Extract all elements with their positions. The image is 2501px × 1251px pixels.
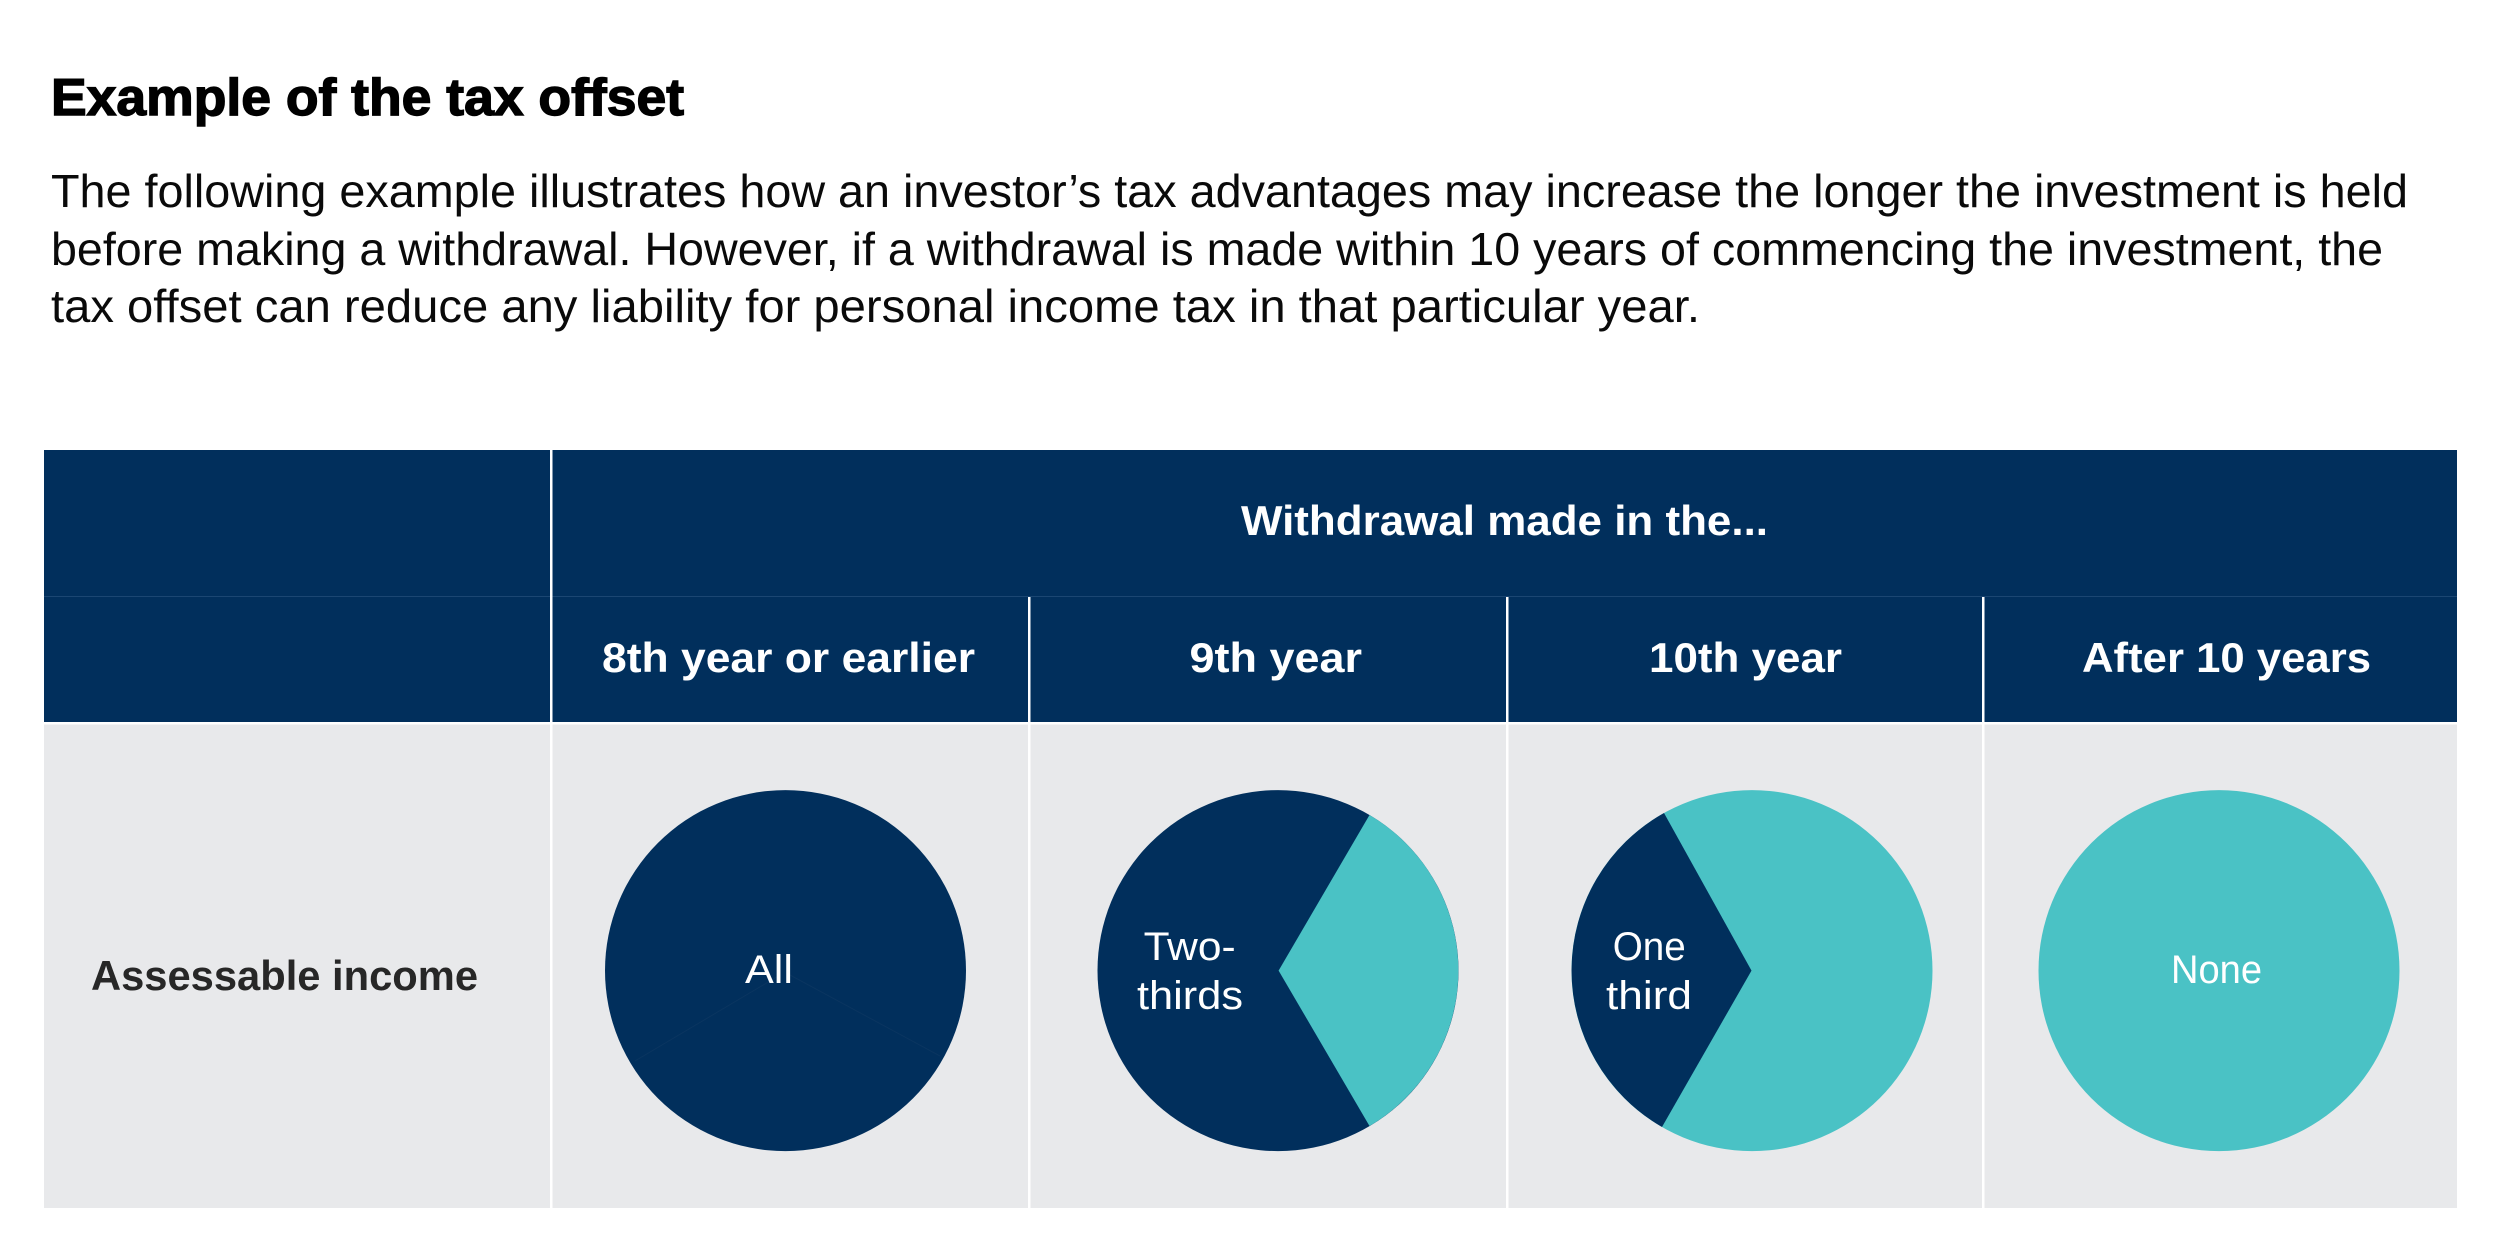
- intro text block: The following example illustrates how an investor’s tax advantages may increase the longer the investment is held: [51, 165, 2408, 217]
- panel: table: [44, 450, 2457, 1208]
- pie chart: one third: One: [1613, 925, 1686, 969]
- intro text block: before making a withdrawal. However, if a withdrawal is made within 10 years of commencing the investment, the: [51, 223, 2383, 275]
- header: after 10 years: After 10 years: [2082, 634, 2371, 681]
- title: Example of the tax offset: [51, 69, 684, 127]
- table body background: [44, 724, 2457, 1208]
- pie chart: none: None: [2171, 948, 2262, 992]
- pie chart: none: [2038, 790, 2400, 1151]
- table header background: [44, 450, 2457, 722]
- pie chart: two-thirds: Two-: [1144, 925, 1236, 969]
- pie chart: all: [605, 790, 966, 1151]
- row label: assessable income: Assessable income: [91, 952, 478, 999]
- intro text block: tax offset can reduce any liability for personal income tax in that particular year.: [51, 280, 1700, 332]
- pie chart: all: All: [745, 948, 793, 992]
- pie chart: one third: third: [1606, 974, 1692, 1018]
- header: 8th year or earlier: 8th year or earlier: [602, 634, 975, 681]
- pie chart: two-thirds: thirds: [1137, 974, 1243, 1018]
- pie chart: two-thirds: [1098, 790, 1458, 1151]
- header: 10th year: 10th year: [1649, 634, 1842, 681]
- header: 9th year: 9th year: [1190, 634, 1362, 681]
- pie chart: one third: [1572, 790, 1932, 1151]
- intro text block: [51, 165, 2408, 332]
- header: withdrawal made in the: Withdrawal made in the...: [1241, 497, 1768, 544]
